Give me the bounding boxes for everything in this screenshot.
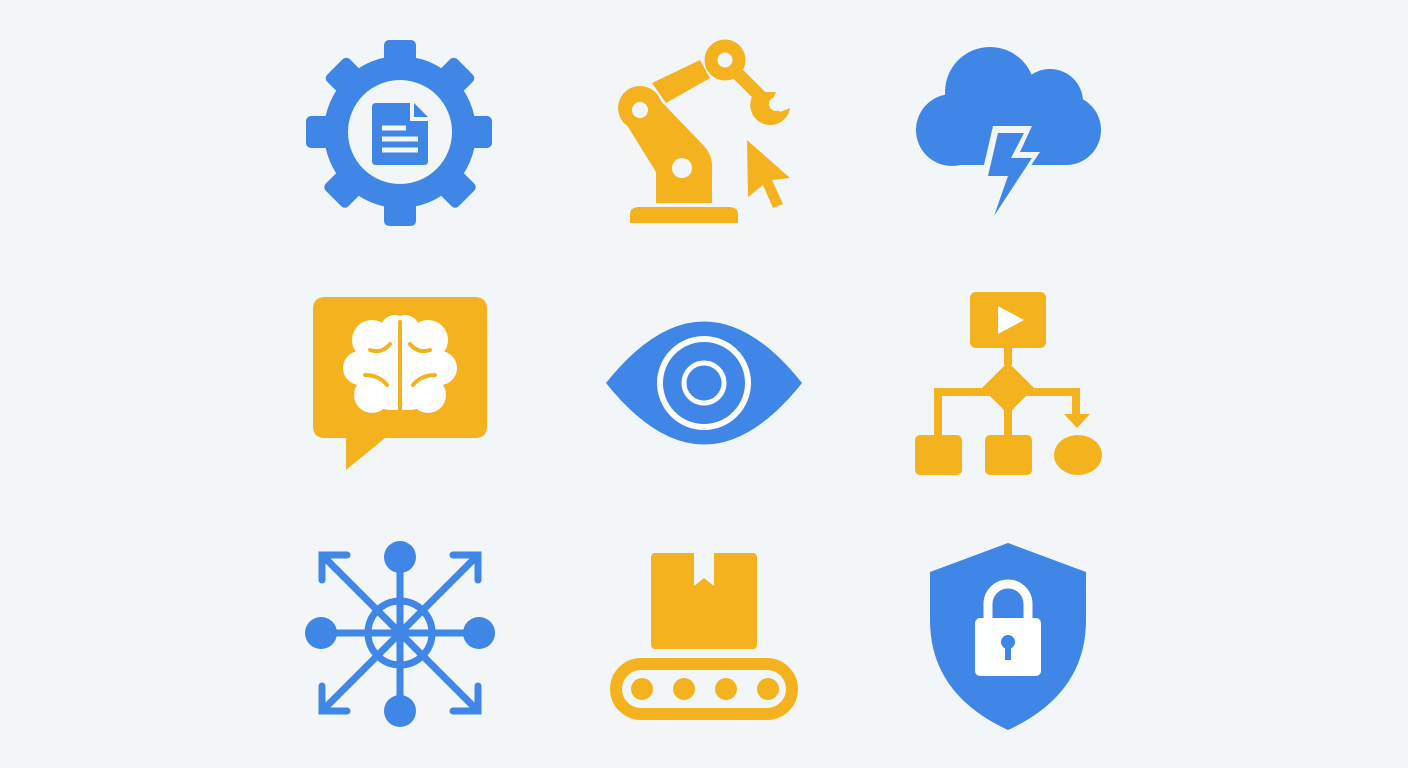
icon: eye: [606, 322, 802, 444]
icon: speech bubble with brain: [313, 297, 487, 470]
icon: shield with padlock: [930, 543, 1086, 730]
icon: gear with document: [306, 40, 492, 226]
icon: robot arm with cursor: [618, 46, 790, 223]
icon: network hub: [305, 541, 495, 727]
icon: flowchart: [915, 292, 1102, 475]
cursor: [747, 140, 790, 208]
icon: box on conveyor: [616, 553, 792, 714]
icon: cloud with lightning: [916, 47, 1101, 222]
wrench: [711, 46, 762, 98]
